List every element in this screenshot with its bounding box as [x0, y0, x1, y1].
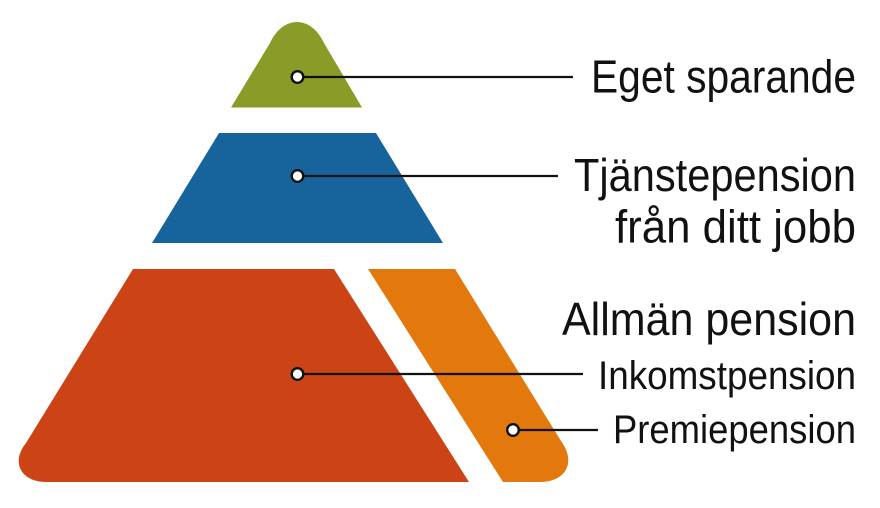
pyramid tier: premiepension (orange) [368, 269, 568, 482]
label: tjänstepension från ditt jobb: Tjänstepension [574, 149, 856, 201]
label: inkomstpension: Inkomstpension [598, 354, 856, 398]
connector: tjänstepension [292, 170, 558, 182]
connector: eget sparande [292, 71, 573, 83]
label: premiepension: Premiepension [613, 408, 856, 452]
pyramid tier: inkomstpension (red) [19, 269, 469, 482]
connector: premiepension [507, 424, 598, 436]
pyramid tier: tjänstepension (blue) [152, 133, 443, 243]
connector: inkomstpension [292, 368, 583, 380]
label: tjänstepension från ditt jobb: från ditt jobb [615, 200, 856, 252]
pyramid tier: eget sparande (green) [231, 22, 362, 108]
label: allmän pension: Allmän pension [562, 293, 856, 345]
label: tjänstepension från ditt jobb [574, 149, 856, 252]
